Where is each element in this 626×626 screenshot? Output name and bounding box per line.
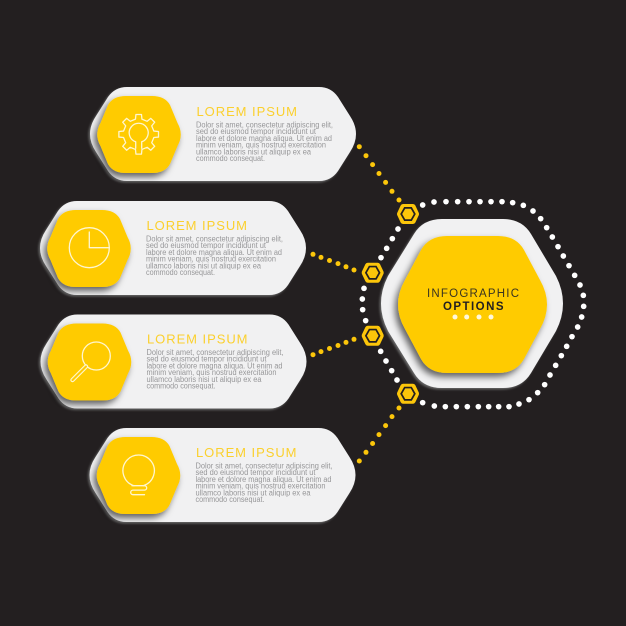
body text 2: commodo consequat.: [146, 268, 215, 277]
body text 2: [146, 234, 283, 277]
white dotted hexagon ring: [359, 199, 586, 409]
card 3: [40, 314, 306, 408]
heading 4: LOREM IPSUM: [196, 445, 296, 460]
body text 3: commodo consequat.: [146, 382, 216, 390]
node hexagon 2: [362, 263, 384, 283]
card 1: [90, 87, 356, 181]
card 2: [40, 201, 306, 295]
body text 1: sed do eiusmod tempor incididunt ut: [196, 127, 317, 136]
icon: magnifying glass: [72, 342, 110, 380]
hub title: INFOGRAPHIC: [427, 288, 519, 300]
body text 2: minim veniam, quis nostrud exercitation: [146, 255, 276, 264]
body text 4: ullamco laboris nisi ut aliquip ex ea: [196, 488, 311, 497]
hexagon 1: [97, 96, 181, 173]
body text 1: labore et dolore magna aliqua. Ut enim ad: [196, 134, 332, 143]
heading 2: LOREM IPSUM: [146, 218, 247, 233]
body text 4: labore et dolore magna aliqua. Ut enim ad: [196, 475, 332, 484]
hub dots: [452, 314, 494, 320]
body text 1: Dolor sit amet, consectetur adipiscing elit,: [196, 120, 333, 130]
body text 2: ullamco laboris nisi ut aliquip ex ea: [146, 261, 262, 270]
panel: option 4: [90, 428, 356, 522]
connector: option 2 dots: [310, 252, 356, 272]
icon: light bulb: [123, 455, 154, 495]
body text 2: Dolor sit amet, consectetur adipiscing elit,: [146, 234, 283, 244]
hexagon 2: [47, 210, 131, 287]
panel: option 1: [90, 87, 356, 181]
body text 2: labore et dolore magna aliqua. Ut enim ad: [146, 248, 282, 257]
node hexagon 4: [397, 384, 419, 404]
body text 2: sed do eiusmod tempor incididunt ut: [146, 241, 267, 250]
body text 4: Dolor sit amet, consectetur adipiscing elit,: [196, 462, 332, 470]
body text 4: [196, 462, 332, 504]
panel: option 3: [40, 314, 306, 408]
body text 1: minim veniam, quis nostrud exercitation: [196, 141, 326, 150]
body text 4: commodo consequat.: [196, 495, 264, 504]
hub outer hexagon: [381, 219, 563, 388]
hub yellow hexagon: [398, 236, 547, 373]
hexagon 4: [97, 437, 180, 514]
panel: option 2: [40, 201, 306, 295]
hub subtitle: OPTIONS: [443, 301, 504, 313]
body text 3: Dolor sit amet, consectetur adipiscing elit,: [146, 348, 284, 357]
node hexagon 3: [362, 326, 384, 346]
node hexagon 1: [397, 204, 419, 224]
body text 3: minim veniam, quis nostrud exercitation: [146, 368, 276, 377]
connector: option 1 dots: [357, 144, 402, 202]
body text 4: minim veniam, quis nostrud exercitation: [196, 482, 326, 491]
body text 4: sed do eiusmod tempor incididunt ut: [196, 468, 316, 477]
body text 3: labore et dolore magna aliqua. Ut enim ad: [146, 361, 282, 370]
body text 3: ullamco laboris nisi ut aliquip ex ea: [146, 375, 262, 384]
card 4: [90, 428, 356, 522]
panel: central hub: [381, 219, 563, 388]
hexagon 3: [48, 324, 131, 400]
body text 1: [196, 120, 333, 163]
body text 1: commodo consequat.: [196, 154, 265, 163]
connector: option 4 dots: [357, 406, 402, 464]
body text 1: ullamco laboris nisi ut aliquip ex ea: [196, 147, 312, 156]
body text 3: sed do eiusmod tempor incididunt ut: [146, 355, 267, 364]
icon: pie chart: [69, 228, 109, 268]
icon: gear: [119, 114, 159, 154]
body text 3: [146, 348, 284, 390]
connector: option 3 dots: [310, 337, 356, 357]
heading 1: LOREM IPSUM: [196, 104, 297, 119]
heading 3: LOREM IPSUM: [147, 332, 248, 346]
